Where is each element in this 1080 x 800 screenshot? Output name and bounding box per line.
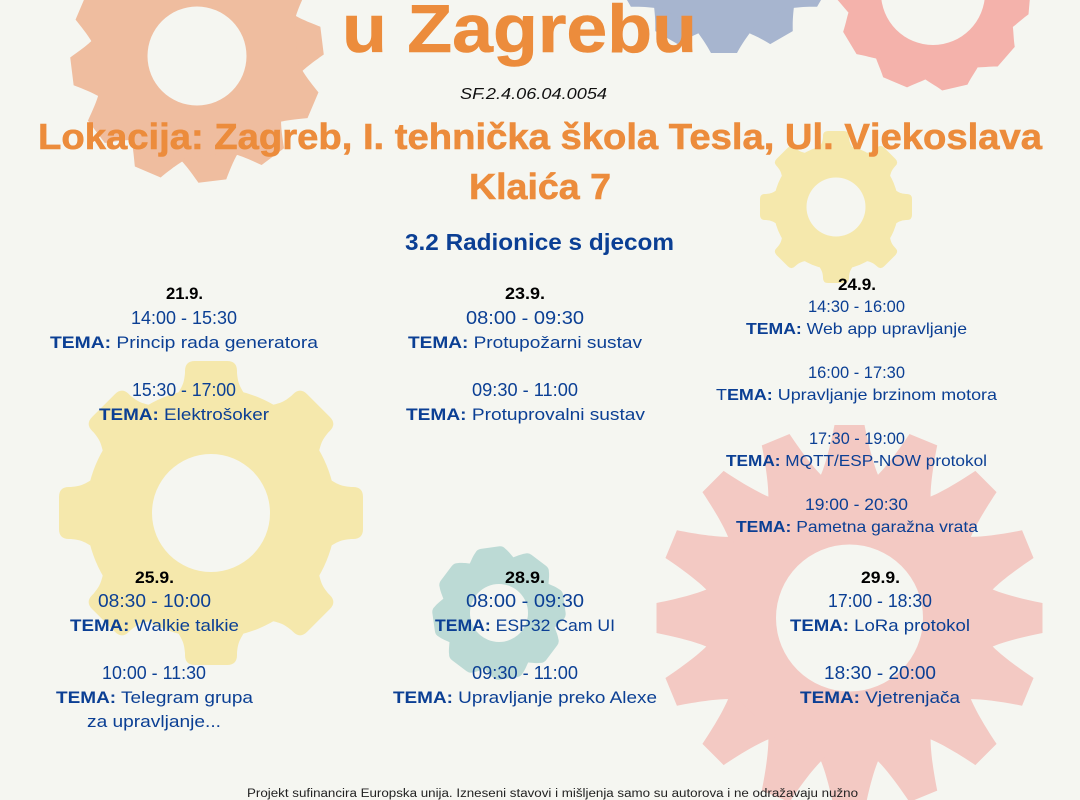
session 1 topic: TEMA: LoRa protokol — [790, 616, 970, 635]
schedule: 21.9. — [50, 284, 319, 424]
icon: orange gear — [68, 0, 326, 185]
session 2: 15:30 - 17:00 — [132, 380, 236, 400]
icon: large yellow gear — [59, 361, 363, 665]
session 1: 14:00 - 15:30 — [131, 308, 237, 328]
icon: large pink gear — [656, 425, 1042, 800]
session 2 topic: TEMA: Elektrošoker — [99, 405, 269, 424]
session 2 topic line 1: TEMA: Telegram grupa — [56, 688, 254, 707]
session 1: 08:00 - 09:30 — [466, 308, 584, 328]
session 2: 10:00 - 11:30 — [102, 663, 206, 683]
session 2: 16:00 - 17:30 — [808, 363, 905, 382]
session 1: 14:30 - 16:00 — [808, 297, 905, 316]
session 4 topic: TEMA: Pametna garažna vrata — [736, 519, 978, 536]
location line 1: Lokacija: Zagreb, I. tehnička škola Tesla, Ul. Vjekoslava — [38, 116, 1043, 157]
section heading: 3.2 Radionice s djecom — [405, 229, 674, 255]
date: 21.9. — [166, 284, 203, 303]
date: 25.9. — [135, 568, 174, 587]
session 2: 18:30 - 20:00 — [824, 663, 936, 683]
session 1: 17:00 - 18:30 — [828, 591, 932, 611]
session 2 topic: TEMA: Upravljanje brzinom motora — [716, 387, 997, 404]
location heading — [38, 116, 1043, 207]
session 2: 09:30 - 11:00 — [472, 380, 578, 400]
date: 29.9. — [861, 568, 900, 587]
session 2 topic: TEMA: Upravljanje preko Alexe — [393, 688, 657, 707]
session 1 topic: TEMA: ESP32 Cam UI — [435, 616, 615, 635]
icon: teal gear — [430, 544, 568, 682]
schedule: 29.9. — [790, 568, 970, 707]
session 2: 09:30 - 11:00 — [472, 663, 578, 683]
schedule: 28.9. — [393, 568, 657, 707]
session 3: 17:30 - 19:00 — [809, 429, 905, 448]
session 2 topic: TEMA: Vjetrenjača — [800, 688, 961, 707]
session 1 topic: TEMA: Protupožarni sustav — [408, 333, 643, 352]
location line 2: Klaića 7 — [469, 166, 611, 207]
icon: pink gear top right — [834, 0, 1032, 94]
icon: small yellow gear — [760, 131, 912, 283]
schedule: 25.9. — [56, 568, 254, 731]
date: 23.9. — [505, 284, 545, 303]
session 2 topic: TEMA: Protuprovalni sustav — [406, 405, 646, 424]
date: 28.9. — [505, 568, 545, 587]
footer disclaimer: Projekt sufinancira Europska unija. Izneseni stavovi i mišljenja samo su autorova i ne odražavaju nužno — [247, 788, 858, 800]
session 1 topic: TEMA: Web app upravljanje — [746, 321, 967, 338]
schedule: 24.9. — [716, 275, 997, 536]
session 1 topic: TEMA: Princip rada generatora — [50, 333, 319, 352]
session 4: 19:00 - 20:30 — [805, 495, 908, 514]
session 1 topic: TEMA: Walkie talkie — [70, 616, 239, 635]
date: 24.9. — [838, 275, 876, 294]
project code: SF.2.4.06.04.0054 — [460, 86, 607, 103]
icon: blue gear — [609, 0, 839, 53]
schedule: 23.9. — [406, 284, 646, 424]
session 1: 08:00 - 09:30 — [466, 591, 584, 611]
session 1: 08:30 - 10:00 — [98, 591, 211, 611]
session 2 topic line 2: za upravljanje... — [87, 712, 221, 731]
session 3 topic: TEMA: MQTT/ESP-NOW protokol — [726, 453, 987, 470]
